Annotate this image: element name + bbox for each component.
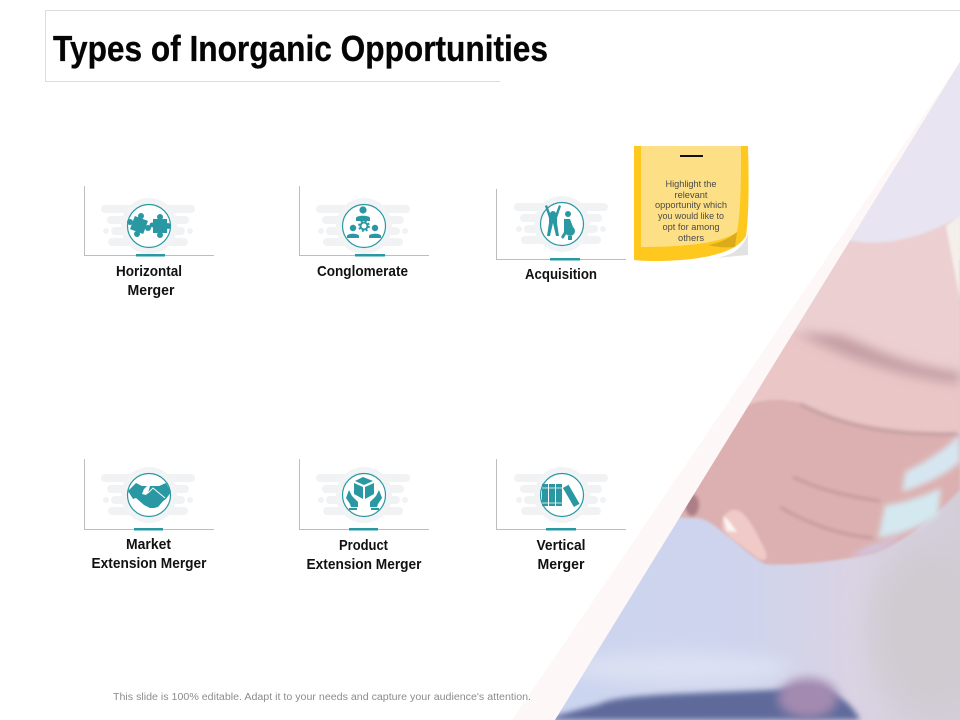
fingertip reflections <box>850 434 960 556</box>
hand <box>660 216 960 565</box>
note text <box>655 179 727 243</box>
label: Horizontal <box>116 263 182 280</box>
photo: handshake <box>540 50 960 720</box>
note text: Highlight the <box>666 179 716 189</box>
note text: opportunity which <box>655 200 727 210</box>
footer note: This slide is 100% editable. Adapt it to your needs and capture your audience's attention. <box>113 692 531 703</box>
note text: you would like to <box>658 211 724 221</box>
label <box>92 536 207 572</box>
label: Extension Merger <box>306 556 422 573</box>
icon: box held by hands <box>346 477 382 510</box>
label <box>116 263 182 299</box>
label: Acquisition <box>525 266 597 283</box>
card: Conglomerate <box>300 186 429 280</box>
note text: relevant <box>674 190 708 200</box>
label <box>306 537 422 573</box>
icon: puzzle pieces <box>127 213 171 238</box>
card: Horizontal Merger <box>84 186 214 299</box>
dash <box>680 155 703 157</box>
card: Vertical Merger <box>496 459 626 573</box>
label: Market <box>126 536 171 553</box>
icon: people and gear <box>347 206 381 238</box>
label: Extension Merger <box>92 555 207 572</box>
note text: opt for among <box>662 222 720 232</box>
pale diagonal band <box>512 62 960 720</box>
label: Merger <box>128 282 175 299</box>
label <box>536 537 586 573</box>
note text: others <box>678 233 705 243</box>
label: Product <box>339 537 388 554</box>
icon: two business people <box>545 205 575 240</box>
card: Acquisition <box>496 189 626 283</box>
card: Market Extension Merger <box>84 459 214 572</box>
icon: handshake <box>128 483 171 508</box>
sticky note <box>634 146 749 261</box>
label: Conglomerate <box>317 263 408 280</box>
label: Merger <box>538 556 585 573</box>
card: Product Extension Merger <box>300 459 429 573</box>
icon: books <box>542 484 580 507</box>
title: Types of Inorganic Opportunities <box>53 28 548 69</box>
label: Vertical <box>536 537 586 554</box>
title frame <box>46 10 960 82</box>
